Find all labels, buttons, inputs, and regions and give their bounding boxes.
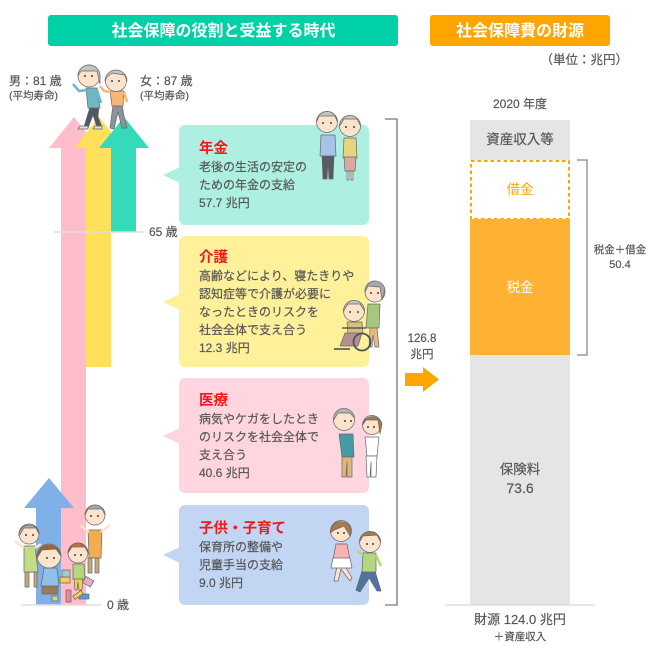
text: medical care description: 支え合う (199, 448, 247, 462)
arrow: medical, pink (49, 117, 99, 605)
heading: children: 子供・子育て (199, 520, 286, 537)
text: long-term care description: 12.3 兆円 (199, 341, 250, 355)
panel: children and child-rearing (163, 505, 381, 605)
label: total revenue (474, 612, 566, 643)
heading: pension: 年金 (199, 139, 228, 157)
segment: insurance premiums (470, 355, 570, 605)
label: taxes plus borrowing: 税金＋借金 (594, 243, 647, 256)
text: pension description: ための年金の支給 (199, 178, 295, 192)
label: age 65: 65 歳 (149, 225, 178, 239)
segment: taxes (470, 219, 570, 355)
text: children description: 9.0 兆円 (199, 576, 243, 590)
heading: long-term care: 介護 (199, 248, 228, 266)
label: taxes plus borrowing: 50.4 (609, 259, 631, 271)
label: male life expectancy (9, 74, 62, 102)
label: total 126.8 (408, 333, 436, 361)
text: medical care description (199, 411, 319, 480)
life-stage arrows (24, 117, 149, 605)
text: pension description: 老後の生活の安定の (199, 160, 307, 174)
arrow: long-term care, yellow (74, 117, 124, 367)
bracket: total benefits (385, 119, 397, 605)
icon: walking children (330, 520, 381, 592)
text: long-term care description: 高齢などにより、寝たきりや (199, 269, 354, 283)
icon: elderly couple standing (316, 112, 360, 180)
text: long-term care description: 社会全体で支え合う (199, 322, 307, 337)
icon: patient and nurse (333, 408, 382, 477)
unit note: （単位：兆円） (540, 53, 628, 67)
text: medical care description: 病気やケガをしたとき (199, 411, 319, 426)
icon: caregiver with wheelchair (334, 281, 385, 350)
label: male life expectancy: 男：81 歳 (9, 74, 62, 88)
text: medical care description: 40.6 兆円 (199, 466, 250, 480)
label: total revenue: 財源 124.0 兆円 (474, 612, 566, 627)
heading: funding sources: 社会保障費の財源 (456, 21, 584, 40)
label: female life expectancy (140, 74, 193, 102)
label: fiscal year: 2020 年度 (493, 97, 547, 111)
label: male life expectancy: (平均寿命) (9, 89, 58, 102)
segment: asset income: 資産収入等 (486, 131, 554, 147)
arrow: children, blue (24, 478, 74, 605)
text: children description: 保育所の整備や (199, 539, 283, 554)
label: female life expectancy: 女：87 歳 (140, 74, 193, 88)
segment: insurance premiums: 73.6 (506, 480, 534, 496)
heading: funding sources (430, 15, 610, 46)
label: age 0: 0 歳 (107, 598, 129, 612)
heading: role of social security (48, 15, 398, 46)
panel: long-term care (163, 236, 385, 367)
text: pension description: 57.7 兆円 (199, 196, 250, 210)
text: children description (199, 539, 283, 590)
heading: role of social security: 社会保障の役割と受益する時代 (111, 21, 336, 40)
icon: family group with blocks (15, 505, 110, 602)
panel: medical care (163, 378, 382, 493)
text: children description: 児童手当の支給 (199, 558, 283, 572)
panel: pension (163, 112, 369, 225)
text: long-term care description: 認知症等で介護が必要に (199, 286, 331, 301)
text: long-term care description (199, 269, 354, 355)
segment: taxes: 税金 (506, 280, 534, 295)
segment: insurance premiums: 保険料 (500, 462, 541, 477)
arrow: to funding (405, 367, 439, 392)
label: female life expectancy: (平均寿命) (140, 89, 189, 102)
label: total 126.8: 兆円 (410, 348, 434, 361)
text: pension description (199, 160, 307, 210)
text: medical care description: のリスクを社会全体で (199, 429, 319, 444)
segment: asset income (470, 120, 570, 160)
icon: walking elderly couple (73, 65, 127, 129)
heading: medical care: 医療 (199, 392, 228, 409)
stacked bar: funding (470, 120, 570, 605)
label: taxes plus borrowing (594, 243, 647, 271)
label: total revenue: ＋資産収入 (494, 630, 547, 643)
segment: borrowing: 借金 (506, 182, 534, 197)
segment: borrowing (471, 161, 569, 219)
bracket: taxes plus borrowing (577, 160, 587, 355)
label: total 126.8: 126.8 (408, 333, 436, 345)
text: long-term care description: なったときのリスクを (199, 305, 319, 319)
arrow: pension, green (99, 117, 149, 232)
